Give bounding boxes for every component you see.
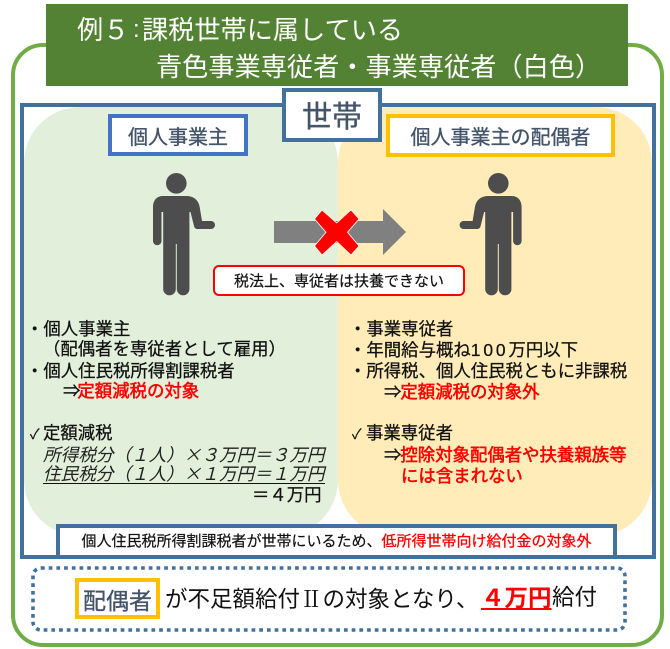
result text: が不足額給付 の対象となり、: [165, 587, 478, 612]
text block: business owner conditions: 定額減税: [43, 423, 113, 443]
line: ⇒定額減税の対象: [63, 381, 199, 401]
panel: spouse background: [338, 107, 652, 536]
text block: business owner conditions: [26, 319, 326, 505]
icon: person right: [460, 173, 522, 295]
title line 2: 青色事業専従者・事業専従者（白色）: [156, 52, 601, 82]
business owner label: [108, 114, 248, 156]
spouse label: [386, 114, 615, 157]
line: ・所得税、個人住民税ともに非課税: [349, 361, 627, 381]
title line 1: :: [133, 16, 140, 43]
note box: [56, 524, 617, 559]
business owner label: 個人事業主: [128, 126, 228, 148]
callout: tax law note: 税法上、専従者は扶養できない: [234, 273, 444, 290]
spouse tag: [75, 578, 160, 619]
result text: 給付: [552, 585, 597, 610]
household label: [282, 88, 382, 142]
icon: person left: [153, 173, 215, 295]
icon: red cross: [314, 210, 359, 255]
check heading: [352, 423, 453, 443]
calculation: resident tax: 住民税分（１人）×１万円＝１万円: [43, 461, 325, 486]
panel: business owner background: [24, 107, 338, 536]
line: ・事業専従者: [349, 319, 453, 339]
result text: ４万円: [481, 585, 552, 611]
line: ・年間給与概ね100万円以下: [349, 340, 578, 360]
result text: Ⅱ: [300, 582, 323, 614]
household label: 世帯: [302, 101, 362, 134]
line: （配偶者を専従者として雇用）: [43, 339, 286, 359]
text block: spouse conditions: 事業専従者: [366, 423, 453, 443]
result text: [165, 582, 597, 614]
total: ＝４万円: [252, 485, 322, 505]
line: ・個人住民税所得割課税者: [26, 361, 235, 381]
spouse label: 個人事業主の配偶者: [410, 127, 590, 149]
note box: 個人住民税所得割課税者が世帯にいるため、: [81, 533, 382, 550]
title line 1: 課税世帯に属している: [142, 15, 403, 45]
note box: 低所得世帯向け給付金の対象外: [382, 533, 592, 550]
line: ⇒控除対象配偶者や扶養親族等: [384, 445, 626, 465]
arrow: [274, 209, 406, 255]
title banner: [46, 4, 628, 86]
spouse tag: 配偶者: [83, 588, 152, 614]
text block: spouse conditions: [349, 319, 627, 486]
line: には含まれない: [401, 466, 523, 486]
title line 1: 例５: [77, 15, 129, 45]
line: ⇒定額減税の対象外: [384, 382, 540, 402]
callout: tax law note: [213, 265, 465, 296]
check heading: ✓: [352, 426, 362, 442]
check heading: [30, 423, 113, 443]
calculation: income tax: 所得税分（１人）×３万円＝３万円: [43, 442, 325, 467]
household frame: [20, 103, 656, 559]
line: ・個人事業主: [26, 319, 130, 339]
check heading: ✓: [30, 426, 40, 442]
